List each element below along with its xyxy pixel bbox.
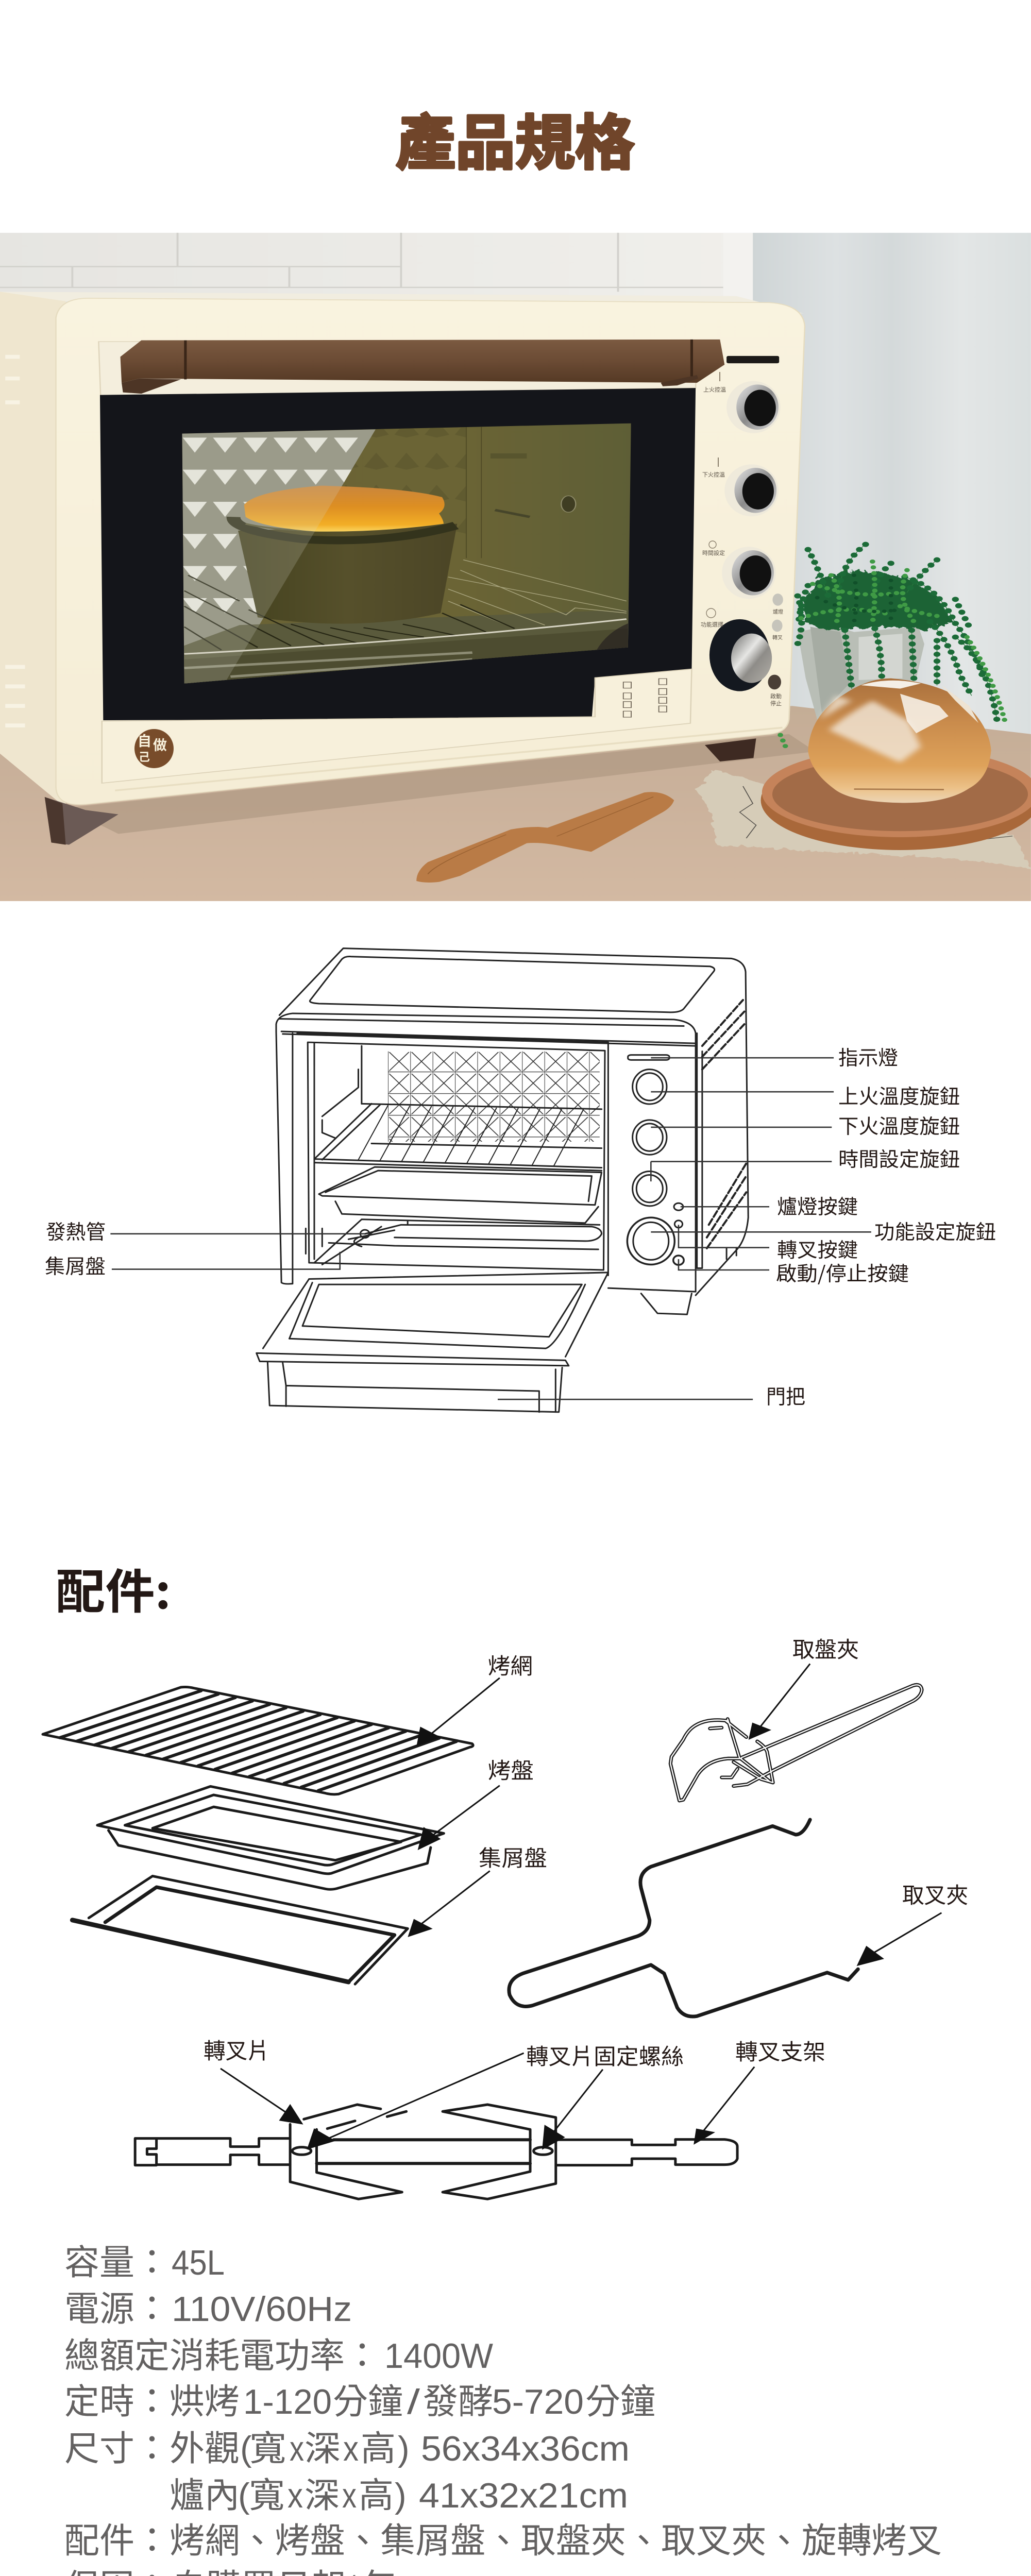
oven front body [56,298,805,805]
panel: specifications text: ) [398,2429,410,2468]
panel: specifications text: ( [240,2429,252,2468]
bread [808,679,991,803]
plant leaves [781,545,1005,751]
accessory labels [204,1632,968,2071]
panel: specifications text: 總額定消耗電功率： [64,2327,380,2378]
panel: specifications text: 41x32x21cm [419,2476,628,2515]
panel: specifications text: / [407,2382,420,2421]
plant pot [798,625,924,720]
diagram labels: 轉叉按鍵 [777,1234,858,1263]
rack slats [184,575,515,650]
oven line drawing [257,948,748,1412]
oven side panel [0,292,803,808]
accessory labels: 轉叉片 [204,2033,269,2065]
control panel labels: 下火控溫 [702,470,725,479]
panel: specifications text: 烘烤 [170,2373,240,2424]
oven window [170,417,644,692]
accessory labels: 轉叉片固定螺絲 [526,2039,684,2071]
rotisserie spit [135,2105,737,2199]
oven feet [45,738,756,845]
bread reflection [590,623,628,682]
panel: specifications text: x [342,2476,357,2515]
panel: specifications text: 深 [305,2467,340,2518]
plant, bread and board [761,545,1031,850]
panel: specifications text: 分鐘 [585,2373,655,2424]
accessory labels: 烤盤 [488,1753,534,1785]
panel: specifications text [64,2234,942,2576]
indicator light slot [726,356,779,363]
background wall and curtain [0,233,1031,753]
control panel labels: 上火控溫 [703,385,726,394]
diagram labels [45,1042,996,1410]
panel: specifications text: 1400W [384,2336,493,2376]
diagram labels: 發熱管 [46,1216,106,1245]
diagram labels: 爐燈按鍵 [777,1191,858,1220]
diagram labels: 門把 [766,1381,805,1410]
panel: specifications text: 高 [359,2467,394,2518]
panel: specifications text: x [343,2429,359,2468]
wooden table [0,706,1031,901]
panel: specifications text: 外觀 [170,2420,240,2471]
reflected diamond wall [170,424,387,692]
accessory labels: 取盤夾 [792,1632,859,1664]
panel: specifications text: 寬 [249,2420,286,2471]
diagram labels: 集屑盤 [45,1251,106,1280]
function legend grid [623,679,667,717]
panel: specifications text: ( [238,2476,250,2515]
control panel labels: 時間設定 [702,549,725,557]
panel: specifications text: 容量： [64,2234,170,2285]
serving tongs outline [670,1685,922,1801]
diagram labels: 下火溫度旋鈕 [838,1111,960,1140]
panel: specifications text: ) [395,2476,407,2515]
title: 產品規格 [396,95,635,181]
control panel labels: 啟動 [770,692,782,700]
cake pan [233,517,457,624]
panel: specifications text: 爐內 [170,2467,240,2518]
control panel labels: 轉叉 [772,633,783,641]
floor and rear rack [170,560,630,692]
panel: specifications text: 尺寸： [64,2420,170,2471]
glass reflection [170,424,387,692]
body crease [115,727,783,790]
control panel labels: 停止 [770,699,782,707]
brand logo badge: 自 [138,730,151,750]
diagram labels: 時間設定旋鈕 [838,1144,960,1173]
panel: specifications text: 電源： [64,2280,170,2331]
diagram labels: 上火溫度旋鈕 [838,1081,960,1110]
heading: accessories: 配件: [56,1554,171,1622]
diagram labels: 指示燈 [838,1042,898,1071]
serving tongs wire highlight [670,1685,922,1801]
brand logo badge: 做 [153,734,167,754]
accessory labels: 轉叉支架 [735,2035,825,2066]
brand logo badge: 己 [139,748,150,765]
panel: specifications text: 寬 [249,2467,285,2518]
diagram labels: 功能設定旋鈕 [874,1216,996,1245]
door glass [100,388,696,720]
panel: specifications text: 發酵 [423,2373,493,2424]
panel: oven photo [0,233,1031,901]
control panel labels [701,372,783,707]
accessory labels: 集屑盤 [479,1841,547,1873]
panel: specifications text: x [288,2476,303,2515]
linen cloth [697,769,1031,869]
panel: accessories diagram [43,1632,968,2199]
control panel labels: 功能選擇 [701,620,723,629]
panel: specifications text: x [290,2429,304,2468]
oven door handle [121,340,724,394]
wooden board [761,748,1031,850]
panel: oven parts diagram [45,948,996,1412]
accessories line drawing [43,1687,858,2016]
panel: specifications text: 定時： [64,2373,170,2424]
cake [244,486,445,532]
control knobs [709,381,783,691]
accessory labels: 取叉夾 [902,1878,968,1910]
panel: specifications text: 56x34x36cm [421,2429,630,2468]
diagram labels: 啟動/停止按鍵 [776,1258,909,1287]
panel: specifications text: 分鐘 [333,2373,403,2424]
table shadow under oven [66,734,815,834]
diagram leader lines [110,1058,871,1399]
accessory arrows [409,1664,941,1965]
control panel labels: 爐燈 [773,607,783,615]
panel: specifications text: 5-720 [492,2382,584,2421]
panel: specifications text: 45L [172,2243,225,2282]
panel: specifications text: 配件：烤網、烤盤、集屑盤、取盤夾、取叉夾、旋轉烤叉 [64,2512,942,2563]
panel: specifications text: 高 [361,2420,396,2471]
accessory labels: 烤網 [488,1649,533,1681]
panel: specifications text: 深 [305,2420,341,2471]
door lower strip [102,669,691,783]
panel: specifications text: 110V/60Hz [172,2290,352,2329]
wooden spatula [416,792,674,883]
brand logo badge [134,729,174,768]
spit arrows [221,2053,754,2148]
door upper strip [98,341,697,396]
panel: specifications text: 1-120 [243,2382,332,2421]
